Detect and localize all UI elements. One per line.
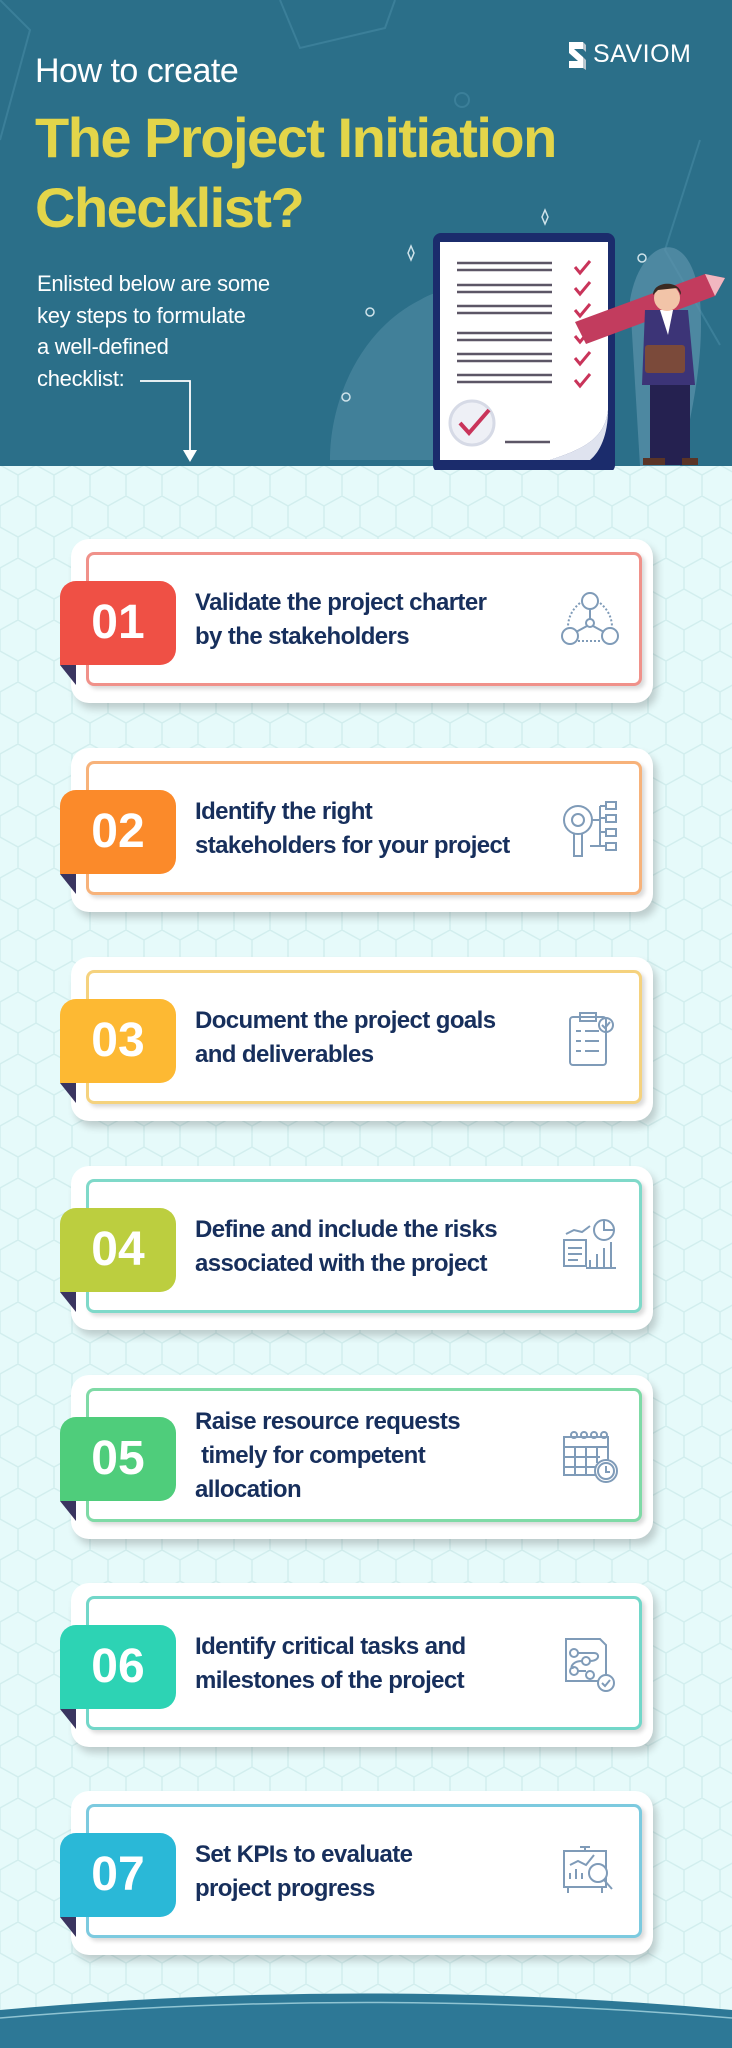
badge 02: 02 [91,805,145,858]
text 06: Identify critical tasks and [195,1633,466,1660]
title: main [35,106,556,239]
header background [0,0,732,466]
card 01 [60,539,660,712]
text 04 [195,1216,497,1277]
text 07: project progress [195,1875,375,1902]
text 07: Set KPIs to evaluate [195,1841,412,1868]
text 03 [195,1007,496,1068]
icon: KPI board magnifier [563,1846,613,1893]
title: main: The Project Initiation [35,106,556,169]
title: main: Checklist? [35,176,303,239]
badge 03 [60,999,176,1083]
badge 07: 07 [91,1848,145,1901]
icon: gear search [563,801,617,857]
text 04: Define and include the risks [195,1216,497,1243]
badge 04: 04 [91,1223,145,1276]
icon: milestones doc [565,1638,615,1692]
card 02 [60,748,660,922]
icon: charts [563,1219,616,1269]
text 02: Identify the right [195,798,372,825]
text 01 [195,589,487,650]
badge 01: 01 [91,596,145,649]
illustration: clipboard and businessman [433,233,725,470]
text 03: Document the project goals [195,1007,495,1034]
card 06 [60,1583,660,1756]
text 05: Raise resource requests [195,1408,460,1435]
text 05: allocation [195,1476,301,1503]
text 04: associated with the project [195,1250,487,1277]
arrow [140,380,197,462]
badge 05 [60,1417,176,1501]
badge 05: 05 [91,1432,145,1485]
text 07 [195,1841,412,1902]
text 01: Validate the project charter [195,589,486,616]
icon: clipboard checklist [569,1012,614,1066]
badge 04 [60,1208,176,1292]
text 05 [195,1408,460,1503]
subtitle text: a well-defined [37,334,169,359]
text 06: milestones of the project [195,1667,464,1694]
text 02: stakeholders for your project [195,832,510,859]
subtitle text: checklist: [37,366,124,390]
card 04 [60,1166,660,1340]
badge 01 [60,581,176,665]
title: how to create: How to create [35,52,238,90]
footer wave [0,1994,732,2048]
text 05: timely for competent [201,1442,425,1469]
text 06 [195,1633,466,1694]
card 05 [60,1375,660,1548]
card 07 [60,1791,660,1964]
text 01: by the stakeholders [195,623,409,650]
icon: stakeholder network [561,592,619,645]
badge 06 [60,1625,176,1709]
subtitle text [37,271,270,390]
logo: SAVIOM: SAVIOM [593,40,691,68]
text 02 [195,798,510,859]
badge 07 [60,1833,176,1917]
badge 02 [60,790,176,874]
badge 03: 03 [91,1014,145,1067]
badge 06: 06 [91,1640,145,1693]
subtitle text: Enlisted below are some [37,271,270,296]
card 03 [60,957,660,1130]
subtitle text: key steps to formulate [37,302,246,328]
text 03: and deliverables [195,1041,374,1068]
icon: calendar clock [563,1431,618,1483]
